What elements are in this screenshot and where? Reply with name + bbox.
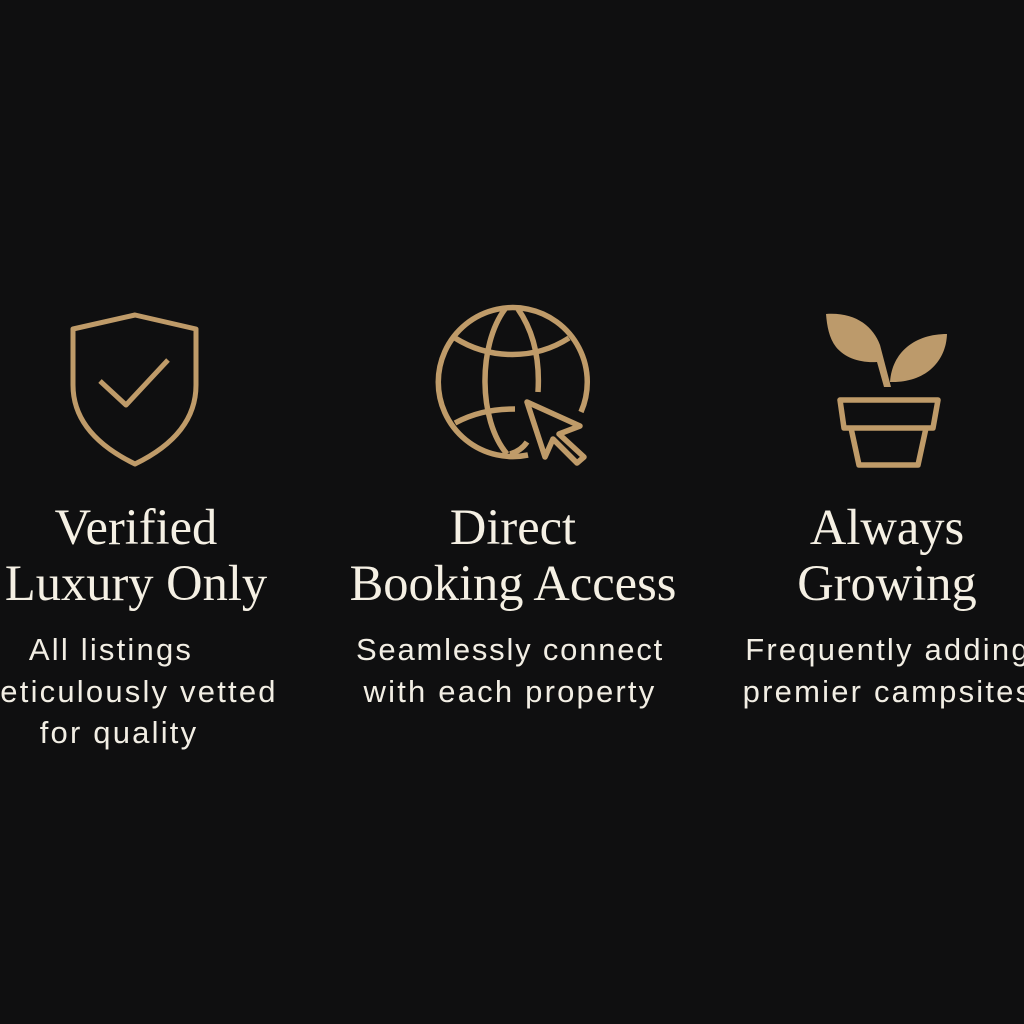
heading: Always Growing: Always xyxy=(810,499,964,555)
icon: potted plant xyxy=(826,314,947,465)
heading: Direct Booking Access xyxy=(350,499,676,611)
text: always growing description xyxy=(743,632,1024,708)
text: always growing description: Frequently adding xyxy=(745,632,1024,667)
heading: Verified Luxury Only xyxy=(5,499,267,611)
icon: shield with check xyxy=(73,315,196,464)
text: verified description: All listings xyxy=(29,632,193,667)
heading: Direct Booking Access: Direct xyxy=(450,499,576,555)
text: direct booking description xyxy=(356,632,664,708)
heading: Verified Luxury Only: Verified xyxy=(55,499,217,555)
heading: Always Growing: Growing xyxy=(797,555,977,611)
heading: Direct Booking Access: Booking Access xyxy=(350,555,676,611)
text: direct booking description: with each property xyxy=(364,674,656,708)
text: direct booking description: Seamlessly connect xyxy=(356,632,664,667)
icon: globe with cursor xyxy=(438,308,587,463)
heading: Verified Luxury Only: Luxury Only xyxy=(5,555,267,611)
text: verified description line 3: for quality xyxy=(40,715,198,750)
heading: Always Growing xyxy=(797,499,977,611)
